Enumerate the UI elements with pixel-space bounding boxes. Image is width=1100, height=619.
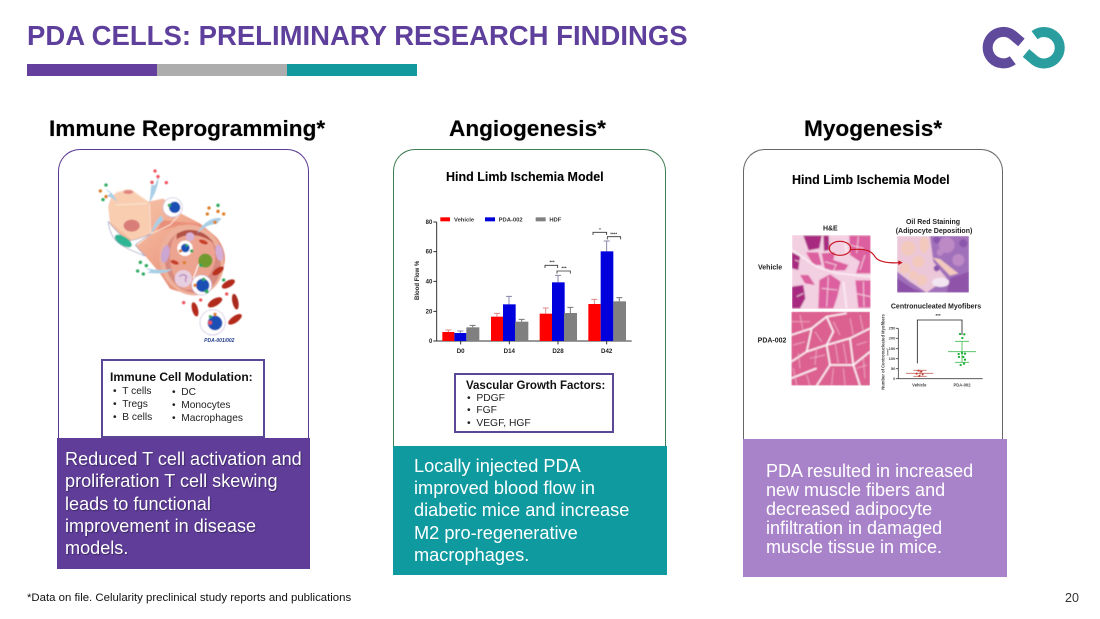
- footnote: *Data on file. Celularity preclinical study reports and publications: [27, 592, 351, 604]
- bar chart: blood flow: 80: [426, 220, 433, 226]
- callout: immune cell modulation: [101, 359, 265, 438]
- heading: immune reprogramming: Immune Reprogramming*: [49, 116, 325, 141]
- callout: immune cell modulation: • T cells: [113, 386, 151, 397]
- lumen: [149, 215, 235, 305]
- error bars: [445, 241, 622, 333]
- bars: [442, 304, 601, 341]
- scatter plot: 0: [893, 376, 896, 381]
- legend: PDA-002: [499, 217, 523, 223]
- scatter plot: [881, 313, 983, 390]
- text block: immune summary: models.: [65, 538, 128, 558]
- histology labels: H&E: [823, 226, 838, 233]
- bar chart: blood flow: Blood Flow %: [415, 260, 421, 300]
- illustration caption: PDA-001/002: [204, 338, 235, 344]
- histology labels: (Adipocyte Deposition): [896, 228, 972, 235]
- bar chart: blood flow: [414, 217, 632, 355]
- red annotation ellipse and arrow: [829, 241, 899, 263]
- subheading: myogenesis model: Hind Limb Ischemia Model: [792, 173, 950, 187]
- panel: angiogenesis card outline: [393, 149, 666, 447]
- endothelial flap: [108, 222, 151, 256]
- text block: angiogenesis summary: diabetic mice and increase: [414, 500, 629, 520]
- x labels: D14: [504, 348, 516, 355]
- text block: angiogenesis summary: M2 pro-regenerative: [414, 523, 578, 543]
- text block: myogenesis summary: decreased adipocyte: [766, 499, 932, 519]
- callout: vascular growth factors: • FGF: [467, 405, 497, 416]
- bar chart: blood flow: 60: [426, 250, 433, 256]
- title accent bar: [27, 64, 417, 76]
- scatter plot: 150: [889, 346, 896, 351]
- text block: immune summary: improvement in disease: [65, 516, 256, 536]
- secreted arrows: [105, 189, 117, 203]
- scatter plot: 200: [889, 336, 896, 341]
- callout: immune cell modulation: • Tregs: [113, 399, 148, 410]
- text block: immune summary: Reduced T cell activation and: [65, 449, 302, 469]
- text block: angiogenesis summary: improved blood flow in: [414, 478, 595, 498]
- callout: immune cell modulation: • DC: [172, 387, 196, 398]
- bar chart: blood flow: 0: [429, 339, 433, 345]
- callout: immune cell modulation: Immune Cell Modulation:: [110, 370, 253, 384]
- callout: immune cell modulation: • B cells: [113, 412, 152, 423]
- bar chart: blood flow: 40: [426, 279, 433, 285]
- vessel body: [108, 189, 225, 293]
- histology labels: PDA-002: [758, 337, 787, 344]
- bar chart: blood flow: *: [599, 227, 601, 232]
- PDA cells: [163, 198, 182, 217]
- histology labels: Centronucleated Myofibers: [891, 304, 981, 311]
- bar chart: blood flow: ***: [549, 260, 555, 265]
- histology labels: Oil Red Staining: [906, 219, 960, 226]
- y axis: [433, 222, 632, 344]
- legend: [440, 217, 562, 223]
- callout: vascular growth factors: [454, 373, 614, 433]
- scatter plot: 50: [891, 366, 896, 371]
- heading: myogenesis: Myogenesis*: [804, 116, 942, 141]
- subheading: angiogenesis model: Hind Limb Ischemia Model: [446, 170, 604, 184]
- heading: angiogenesis: Angiogenesis*: [449, 116, 606, 141]
- H&E vehicle image: [792, 235, 871, 309]
- icon: company logo: [982, 26, 1065, 68]
- text block: immune summary: [57, 438, 310, 569]
- x labels: [457, 348, 613, 355]
- histology labels: Vehicle: [758, 265, 782, 272]
- histology and scatter panel: [758, 218, 983, 390]
- page number: 20: [1065, 591, 1079, 605]
- callout: vascular growth factors: Vascular Growth Factors:: [466, 380, 605, 392]
- text block: angiogenesis summary: [393, 446, 667, 575]
- text block: myogenesis summary: PDA resulted in increased: [766, 461, 973, 481]
- bar chart: blood flow: 20: [426, 309, 433, 315]
- text block: myogenesis summary: infiltration in damaged: [766, 518, 942, 538]
- title: PDA CELLS: PRELIMINARY RESEARCH FINDINGS: [27, 20, 688, 51]
- callout: immune cell modulation: • Monocytes: [172, 400, 230, 411]
- bar chart: blood flow: ****: [610, 231, 617, 236]
- callout: vascular growth factors: • VEGF, HGF: [467, 418, 531, 429]
- text block: angiogenesis summary: macrophages.: [414, 545, 529, 565]
- oil red image: [897, 236, 969, 293]
- illustration: blood vessel with PDA cells: [98, 168, 243, 344]
- panel: myogenesis card outline: [743, 149, 1003, 441]
- text block: myogenesis summary: [743, 439, 1007, 577]
- text block: angiogenesis summary: Locally injected PDA: [414, 456, 581, 476]
- bar chart: blood flow: ***: [561, 266, 567, 271]
- significance brackets: [545, 232, 621, 274]
- histology labels: [758, 219, 981, 344]
- secreted factor dots: [101, 183, 225, 282]
- x labels: D42: [601, 348, 613, 355]
- scatter plot: 100: [889, 356, 896, 361]
- red blood cells: [170, 259, 179, 266]
- scatter plot: PDA-002: [953, 382, 971, 387]
- legend: Vehicle: [454, 217, 475, 223]
- scatter plot: /mm²: [885, 348, 889, 356]
- scatter plot: Vehicle: [912, 382, 927, 387]
- scatter plot: 250: [889, 326, 896, 331]
- text block: myogenesis summary: new muscle fibers and: [766, 480, 945, 500]
- callout: immune cell modulation: • Macrophages: [172, 413, 243, 424]
- text block: immune summary: proliferation T cell skewing: [65, 471, 278, 491]
- x labels: D0: [457, 348, 465, 355]
- text block: immune summary: leads to functional: [65, 494, 211, 514]
- legend: HDF: [549, 217, 562, 223]
- panel: immune card outline: [58, 149, 309, 439]
- scatter plot: Number of Centronucleated Myofibers: [881, 314, 886, 390]
- scatter plot: ***: [935, 313, 941, 318]
- H&E PDA-002 image: [791, 312, 870, 386]
- text block: myogenesis summary: muscle tissue in mice.: [766, 537, 942, 557]
- x labels: D28: [552, 348, 564, 355]
- callout: vascular growth factors: • PDGF: [467, 393, 505, 404]
